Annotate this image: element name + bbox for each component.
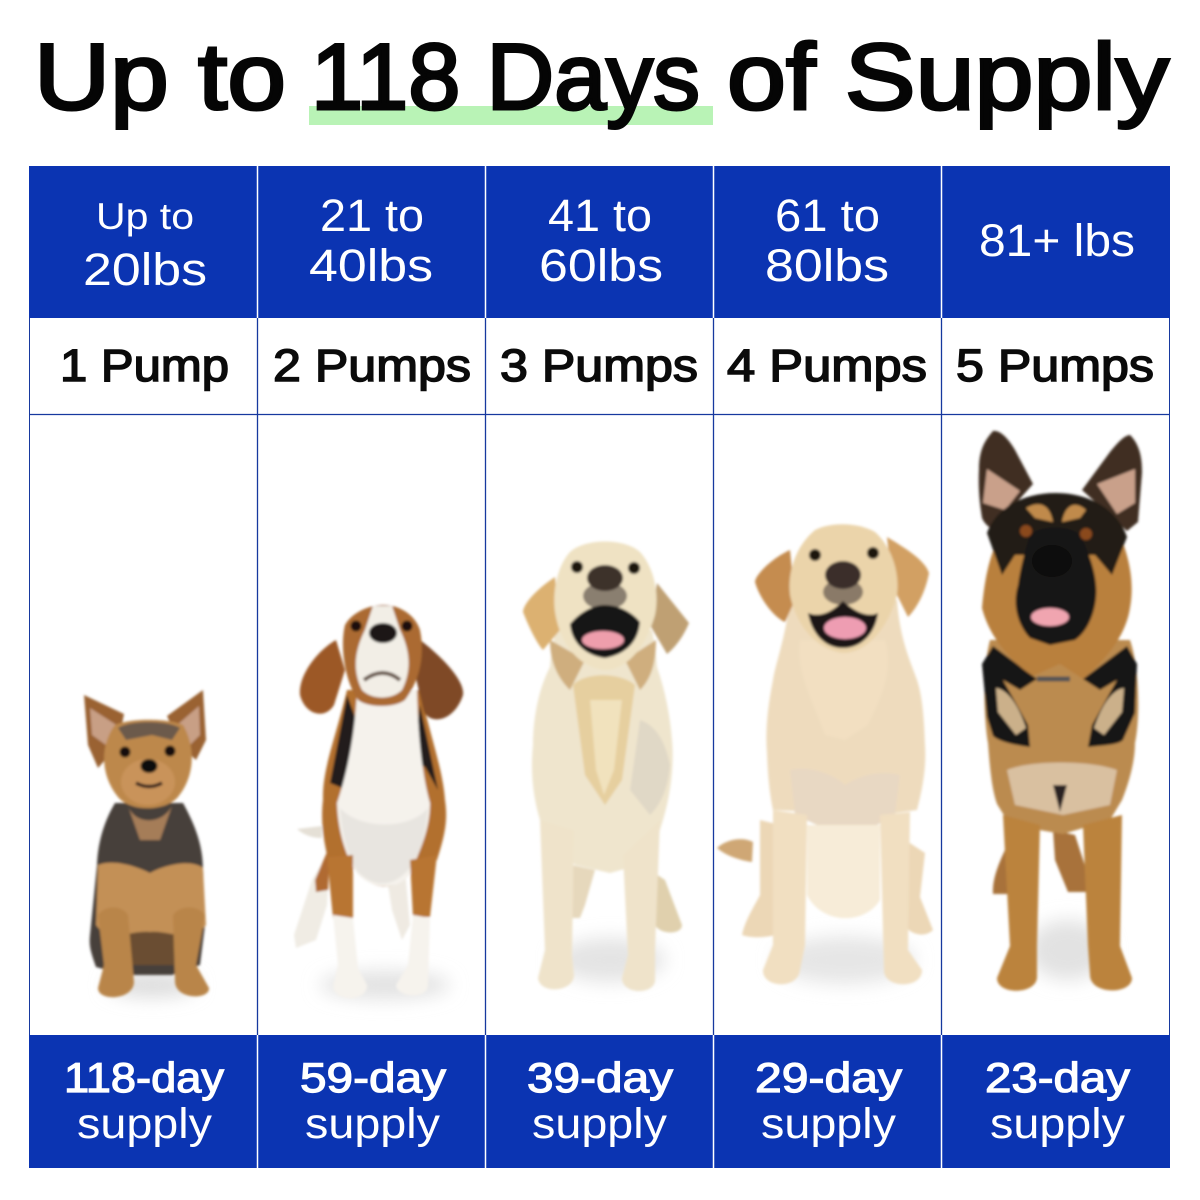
header row: weight ranges: 60lbs xyxy=(539,240,663,291)
footer row: days of supply: supply xyxy=(532,1100,668,1148)
footer row: days of supply: 118-day xyxy=(64,1054,224,1101)
footer row: days of supply: 23-day xyxy=(985,1054,1130,1101)
footer row: days of supply: supply xyxy=(305,1100,441,1148)
footer row: days of supply: 59-day xyxy=(300,1054,446,1101)
dog 1: small yorkie, up to 20 lbs xyxy=(84,690,209,997)
footer row: days of supply: supply xyxy=(77,1100,213,1148)
header row: weight ranges: 41 to xyxy=(548,190,652,241)
header row: weight ranges: 40lbs xyxy=(309,240,433,291)
shepherd torso xyxy=(984,640,1138,834)
pump count row xyxy=(60,340,1154,391)
pump count row: 5 Pumps xyxy=(956,340,1154,391)
dog 5: german shepherd, 81+ lbs xyxy=(979,431,1142,991)
pump count row: 4 Pumps xyxy=(727,340,927,391)
dog 2: beagle, 21 to 40 lbs xyxy=(294,605,463,999)
title: 118 Days xyxy=(311,24,700,129)
title xyxy=(34,24,1169,129)
header row: weight ranges: 20lbs xyxy=(83,244,207,295)
dog 3: golden retriever, 41 to 60 lbs xyxy=(523,542,689,991)
title: Up to xyxy=(34,24,286,129)
footer row: days of supply: supply xyxy=(761,1100,897,1148)
footer row: days of supply: 29-day xyxy=(755,1054,902,1101)
header row: weight ranges: Up to xyxy=(96,196,194,237)
shepherd neck ruff xyxy=(982,535,1132,679)
footer row: days of supply xyxy=(29,1035,1170,1168)
header row: weight ranges: 81+ lbs xyxy=(979,215,1135,266)
footer row: days of supply: supply xyxy=(990,1100,1126,1148)
title: of Supply xyxy=(727,24,1169,129)
table grid xyxy=(29,166,1170,1168)
header row: weight ranges: 80lbs xyxy=(765,240,889,291)
title highlight xyxy=(309,106,713,125)
header row: weight ranges: 61 to xyxy=(775,190,880,241)
pump count row: 1 Pump xyxy=(60,340,229,391)
pump count row: 3 Pumps xyxy=(500,340,698,391)
dog 4: yellow labrador, 61 to 80 lbs xyxy=(717,524,933,984)
footer row: days of supply: 39-day xyxy=(527,1054,673,1101)
header row: weight ranges xyxy=(29,166,1170,318)
header row: weight ranges: 21 to xyxy=(320,190,424,241)
pump count row: 2 Pumps xyxy=(273,340,471,391)
